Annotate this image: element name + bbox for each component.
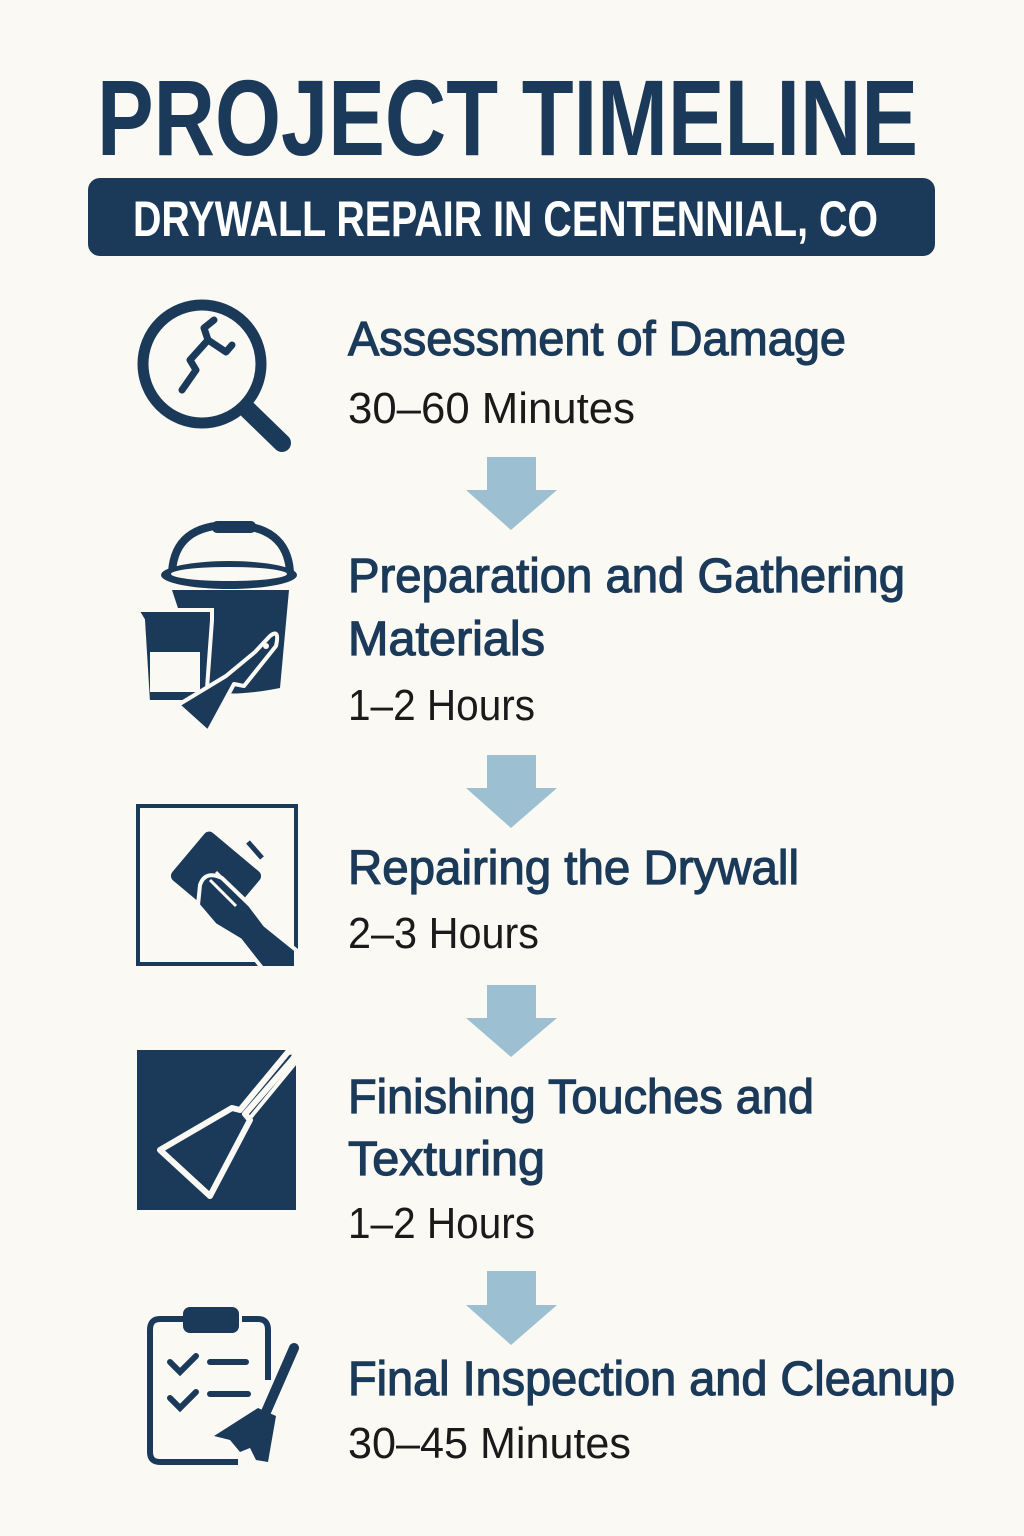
step 2 text: 1–2 Hours bbox=[348, 681, 535, 730]
icon: bucket and putty knife bbox=[137, 521, 297, 732]
icon: sanding hand in frame bbox=[138, 806, 296, 968]
arrow 1 bbox=[466, 457, 557, 530]
step 2 text bbox=[348, 550, 905, 730]
step 5 text bbox=[348, 1353, 955, 1468]
step 4 text bbox=[348, 1071, 814, 1248]
step 1 text bbox=[348, 313, 846, 433]
step 4 text: 1–2 Hours bbox=[348, 1199, 535, 1248]
icon: putty knife on square bbox=[137, 1050, 296, 1210]
icon: clipboard and broom bbox=[150, 1307, 294, 1462]
step 4 text: Finishing Touches and bbox=[348, 1071, 814, 1124]
step 1 text: Assessment of Damage bbox=[348, 313, 846, 366]
step 2 text: Materials bbox=[348, 613, 545, 666]
subtitle banner bbox=[88, 178, 935, 256]
arrow 4 bbox=[466, 1271, 557, 1345]
arrow 2 bbox=[466, 755, 557, 828]
step 2 text: Preparation and Gathering bbox=[348, 550, 905, 603]
arrow 3 bbox=[466, 985, 557, 1057]
step 3 text: Repairing the Drywall bbox=[348, 842, 799, 895]
icon: magnifier with crack bbox=[143, 305, 282, 443]
step 4 text: Texturing bbox=[348, 1133, 545, 1186]
step 5 text: Final Inspection and Cleanup bbox=[348, 1353, 955, 1406]
step 3 text bbox=[348, 842, 799, 958]
step 3 text: 2–3 Hours bbox=[348, 909, 539, 958]
step 1 text: 30–60 Minutes bbox=[348, 384, 635, 433]
step 5 text: 30–45 Minutes bbox=[348, 1419, 631, 1468]
